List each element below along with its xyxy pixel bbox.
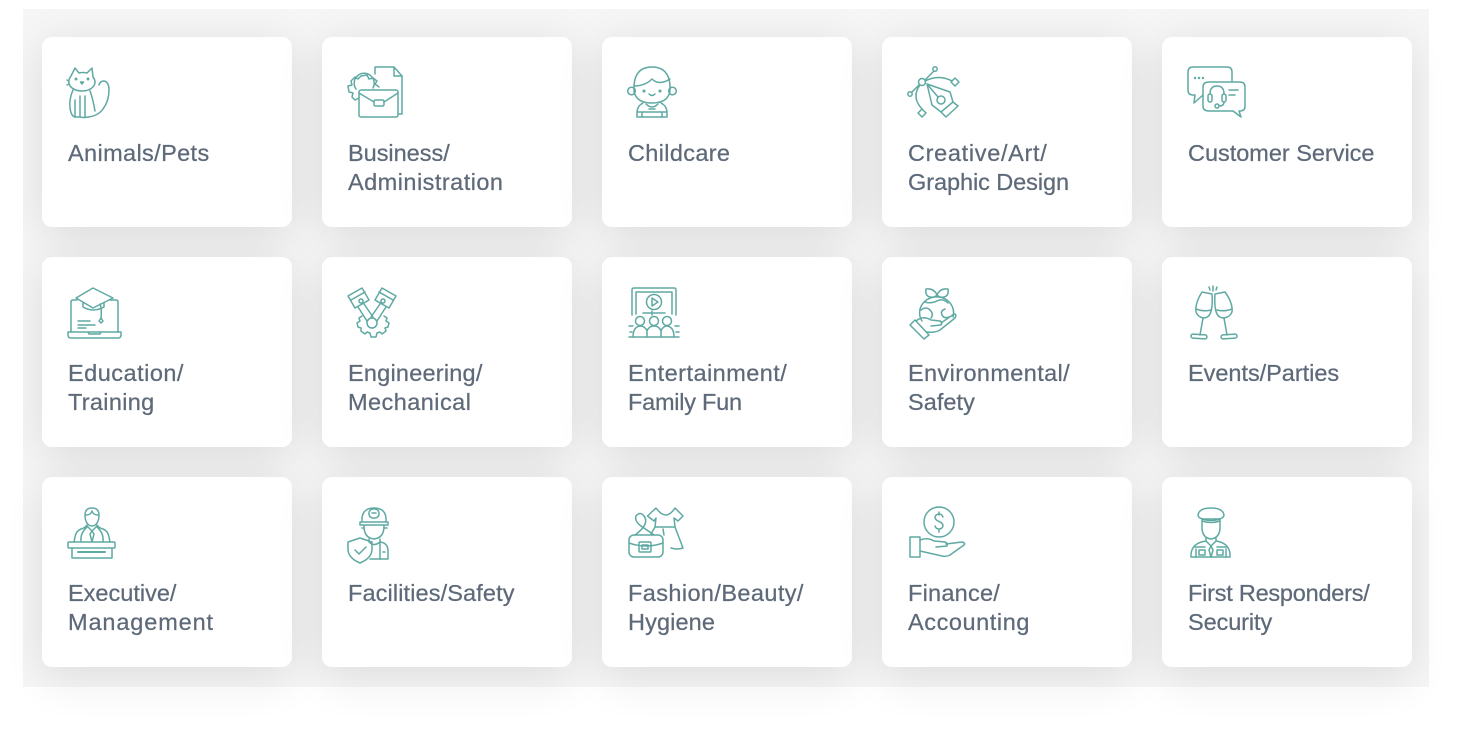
label bbox=[1188, 580, 1370, 636]
icon: support chat bubbles bbox=[1187, 66, 1246, 118]
label bbox=[348, 360, 483, 415]
label: Executive/ bbox=[68, 580, 176, 606]
label bbox=[908, 360, 1070, 416]
icon: child bbox=[627, 66, 677, 118]
label bbox=[908, 140, 1069, 196]
card: Entertainment/Family Fun bbox=[602, 257, 852, 447]
icon: champagne glasses toast bbox=[1190, 285, 1238, 340]
label bbox=[348, 140, 503, 195]
card: Finance/Accounting bbox=[882, 477, 1132, 667]
card: Animals/Pets bbox=[42, 37, 292, 227]
label: Business/ bbox=[348, 140, 450, 166]
label bbox=[628, 360, 787, 416]
icon: hand holding coin bbox=[909, 506, 966, 558]
label: Safety bbox=[908, 389, 975, 415]
label: Hygiene bbox=[628, 609, 715, 635]
icon: hand holding globe bbox=[909, 288, 956, 340]
label: Finance/ bbox=[908, 580, 1000, 606]
card: Events/Parties bbox=[1162, 257, 1412, 447]
card: Executive/Management bbox=[42, 477, 292, 667]
label: Entertainment/ bbox=[628, 360, 787, 386]
icon: worker with shield bbox=[347, 507, 389, 564]
icon: laptop with graduation cap bbox=[67, 287, 122, 339]
label: Childcare bbox=[628, 140, 730, 166]
card: Engineering/Mechanical bbox=[322, 257, 572, 447]
label: Facilities/Safety bbox=[348, 580, 515, 606]
label: Environmental/ bbox=[908, 360, 1070, 386]
label: Family Fun bbox=[628, 389, 742, 415]
card: Childcare bbox=[602, 37, 852, 227]
icon: gear, document and briefcase bbox=[347, 66, 403, 118]
card: Creative bbox=[882, 37, 1132, 227]
icon: engine pistons and gear bbox=[347, 287, 397, 338]
label: Events/Parties bbox=[1188, 360, 1339, 386]
label: Mechanical bbox=[348, 389, 471, 415]
icon: cat bbox=[66, 67, 110, 118]
label: Accounting bbox=[908, 609, 1030, 635]
label bbox=[68, 360, 184, 416]
label: Animals/Pets bbox=[68, 140, 210, 166]
card: Education/Training bbox=[42, 257, 292, 447]
card: Business/Administration bbox=[322, 37, 572, 227]
label: Administration bbox=[348, 169, 503, 195]
card: Fashion/Beauty/Hygiene bbox=[602, 477, 852, 667]
label: Fashion/Beauty/ bbox=[628, 580, 804, 606]
icon: executive at desk bbox=[67, 507, 116, 559]
label: First Responders/ bbox=[1188, 580, 1370, 606]
card: First Responders/Security bbox=[1162, 477, 1412, 667]
card: Environmental/Safety bbox=[882, 257, 1132, 447]
card: Facilities/Safety bbox=[322, 477, 572, 667]
label: Engineering/ bbox=[348, 360, 483, 386]
label: Creative/Art/ bbox=[908, 140, 1047, 166]
label bbox=[908, 580, 1030, 636]
label: Management bbox=[68, 609, 214, 635]
label bbox=[68, 580, 214, 636]
label: Customer Service bbox=[1188, 140, 1374, 166]
label: Security bbox=[1188, 609, 1272, 635]
label: Graphic Design bbox=[908, 169, 1069, 195]
label: Training bbox=[68, 389, 155, 415]
icon: dress and handbag bbox=[628, 507, 684, 558]
icon: officer with cap bbox=[1190, 507, 1231, 558]
label bbox=[628, 580, 804, 636]
icon: pen tool bbox=[907, 66, 960, 118]
icon: audience and screen bbox=[628, 287, 680, 338]
label: Education/ bbox=[68, 360, 184, 386]
card: Customer Service bbox=[1162, 37, 1412, 227]
